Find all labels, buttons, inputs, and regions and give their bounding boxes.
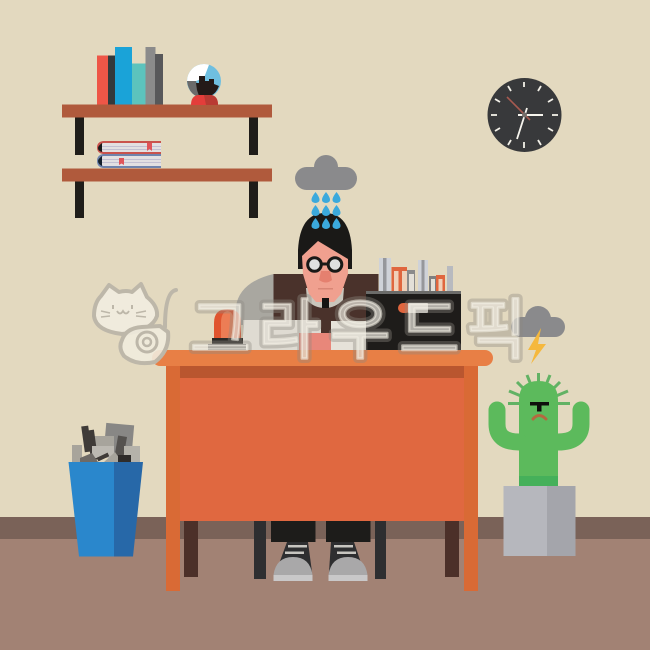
upright books <box>97 47 163 104</box>
watermark wordmark: 드 <box>399 293 460 367</box>
wall <box>0 0 650 517</box>
watermark wordmark: 우 <box>330 293 391 367</box>
trash bin <box>68 462 143 556</box>
desk <box>152 350 493 591</box>
desk back legs <box>184 515 459 577</box>
watermark wordmark: 라 <box>258 293 319 367</box>
vest <box>274 274 378 336</box>
watermark wordmark: 드 <box>399 293 460 367</box>
watermark mascot cat <box>94 284 176 363</box>
mouth <box>318 288 333 290</box>
watermark wordmark: 라 <box>258 293 319 367</box>
lightning bolt <box>528 328 546 364</box>
left paper stack <box>243 320 321 351</box>
nose <box>319 271 332 282</box>
chair legs <box>254 515 386 579</box>
lying books <box>97 141 161 168</box>
watermark wordmark <box>190 293 527 367</box>
cactus face <box>530 402 549 406</box>
watermark wordmark: 픽 <box>466 293 527 367</box>
face <box>302 241 348 302</box>
tie <box>322 298 329 308</box>
right paper stack <box>331 321 367 351</box>
trash bin contents <box>72 423 140 465</box>
watermark wordmark: 픽 <box>466 293 527 367</box>
small storm cloud <box>511 306 565 337</box>
wall shelves <box>62 104 272 218</box>
watermark wordmark: 그 <box>190 293 251 367</box>
books on cabinet <box>379 258 453 291</box>
left shoe <box>274 542 312 581</box>
wall clock <box>488 78 562 152</box>
baseboard <box>0 517 650 539</box>
cactus <box>497 373 581 486</box>
rain drops <box>312 192 340 229</box>
right shoe <box>328 542 368 581</box>
glasses <box>308 258 342 271</box>
watermark wordmark: 우 <box>330 293 391 367</box>
trousers <box>271 515 370 542</box>
floor <box>0 539 650 650</box>
watermark <box>94 284 527 367</box>
plant pot <box>504 486 576 556</box>
hands <box>299 333 332 351</box>
collar <box>306 288 344 308</box>
snow globe <box>187 64 221 105</box>
hair <box>298 213 352 269</box>
watermark wordmark: 그 <box>190 293 251 367</box>
siren <box>208 309 246 350</box>
sleeve <box>236 274 280 325</box>
rain cloud <box>295 155 357 190</box>
file cabinet <box>366 291 461 351</box>
person <box>236 213 378 351</box>
